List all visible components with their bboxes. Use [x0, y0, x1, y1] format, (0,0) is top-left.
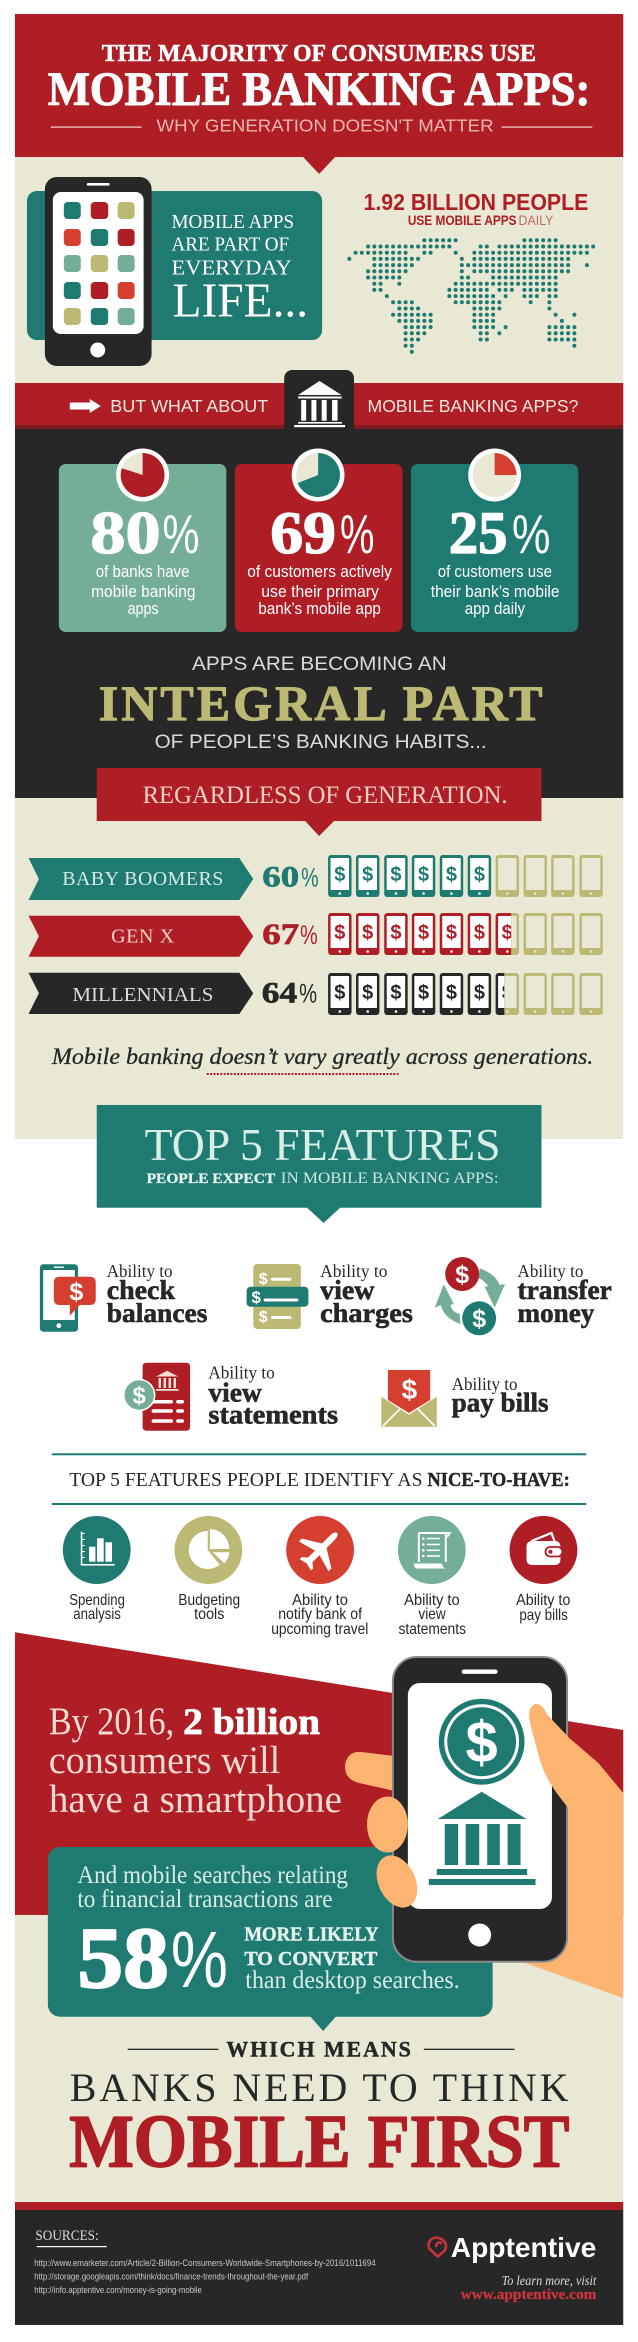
- logo: apptentive: Apptentive: [451, 2232, 596, 2263]
- chevron label: MILLENNIALS: [72, 984, 213, 1006]
- description: app daily: [465, 600, 526, 618]
- label: view: [418, 1606, 446, 1623]
- panel: cream closing section: [15, 1915, 623, 2202]
- band text left: BUT WHAT ABOUT: [110, 396, 268, 416]
- banner: top 5 features: IN MOBILE BANKING APPS:: [281, 1170, 499, 1187]
- card: 80% of banks: [59, 448, 226, 632]
- icon: statement document: $: [133, 1382, 146, 1410]
- icon: wallet: [527, 1533, 562, 1565]
- text: [320, 1261, 413, 1328]
- icon: bar chart: [81, 1532, 115, 1566]
- label: tools: [194, 1606, 225, 1623]
- phone pictogram row: $: [474, 982, 485, 1004]
- icon: bank: [429, 1792, 535, 1885]
- label: [178, 1592, 240, 1623]
- phone pictogram row: $: [334, 864, 345, 886]
- description: of customers use: [438, 563, 552, 581]
- percent: [262, 918, 318, 951]
- text: charges: [320, 1298, 413, 1328]
- callout: 58% more likely to convert: [48, 1847, 493, 2031]
- panel: footer: [15, 2202, 623, 2325]
- callout: 58% more likely to convert: to financial transactions are: [77, 1886, 333, 1913]
- phone pictogram row: [328, 973, 603, 1015]
- text: mobile apps are part of everyday life: EVERYDAY: [172, 256, 292, 280]
- text: check: [107, 1275, 175, 1305]
- number: 80%: 80: [90, 500, 161, 566]
- sources: SOURCES:: [35, 2228, 99, 2244]
- phone pictogram row: $: [446, 864, 457, 886]
- phone pictogram row: $: [474, 864, 485, 886]
- description: of customers actively: [247, 563, 393, 581]
- text: Ability to: [107, 1261, 173, 1281]
- band text right: MOBILE BANKING APPS?: [368, 396, 578, 416]
- text: which means: WHICH MEANS: [226, 2037, 411, 2062]
- row: baby boomers: [29, 855, 603, 900]
- feature: transfer money: [435, 1257, 612, 1335]
- label: analysis: [73, 1606, 121, 1623]
- text: 2 billion consumers: have a smartphone: [49, 1778, 342, 1821]
- hand: thumb and fingers over phone: [367, 1704, 568, 1914]
- heading: apps are becoming an: APPS ARE BECOMING AN: [192, 654, 447, 675]
- text: Ability to: [452, 1374, 518, 1394]
- text: view: [320, 1275, 375, 1305]
- sources: http://storage.googleapis.com/think/docs/finance-trends-throughout-the-year.pdf: [34, 2271, 309, 2281]
- phone pictogram row: $: [502, 922, 513, 944]
- heading: nice to have: [52, 1453, 586, 1505]
- description: of banks have: [96, 563, 189, 581]
- banner: top 5 features: PEOPLE EXPECT: [147, 1171, 275, 1187]
- feature: view charges: [247, 1261, 413, 1329]
- text: balances: [107, 1298, 207, 1328]
- label: [69, 1592, 125, 1623]
- heading: of people's banking habits: OF PEOPLE’S BANKING HABITS...: [155, 732, 487, 753]
- card: 69% of customers: [235, 448, 403, 632]
- phone pictogram row: $: [418, 864, 429, 886]
- number: 80%: [90, 500, 199, 566]
- phone pictogram row: $: [362, 982, 373, 1004]
- card: 25% of customers: [411, 448, 578, 632]
- icon: arrow: [70, 399, 101, 413]
- panel: but what about mobile banking apps band: [15, 383, 623, 429]
- icon: envelope with bill: [381, 1370, 437, 1427]
- phone pictogram row: $: [418, 982, 429, 1004]
- phone pictogram row: $: [390, 982, 401, 1004]
- description: use their primary: [261, 583, 380, 601]
- icon: charges list: $: [259, 1309, 268, 1326]
- title line 1: THE MAJORITY OF CONSUMERS USE: [102, 41, 536, 67]
- stat: 1.92 billion people: DAILY: [519, 213, 553, 228]
- title line 2: MOBILE BANKING APPS:: [48, 63, 590, 116]
- chevron label: [29, 916, 253, 957]
- percent: [262, 977, 317, 1010]
- panel: dark statistics section: [15, 370, 623, 798]
- label: Spending: [69, 1592, 125, 1609]
- feature: pay bills: [381, 1370, 548, 1427]
- banner: regardless of generation: [97, 768, 541, 836]
- text: Ability to: [518, 1261, 583, 1281]
- heading: mobile first: MOBILE FIRST: [69, 2101, 569, 2184]
- percent: 64: [262, 977, 297, 1010]
- callout: 58% more likely to convert: MORE LIKELY: [244, 1924, 379, 1946]
- icon: charges list: $: [252, 1288, 262, 1307]
- text: 2 billion consumers: 2 billion: [183, 1701, 320, 1742]
- label: notify bank of: [278, 1606, 363, 1623]
- label: [516, 1592, 570, 1624]
- chevron label: BABY BOOMERS: [62, 868, 223, 890]
- number: 25%: [449, 500, 550, 566]
- percent: 60: [262, 861, 299, 894]
- callout: 58% more likely to convert: TO CONVERT: [244, 1948, 378, 1970]
- stat: 1.92 billion people: 1.92 BILLION PEOPLE: [363, 189, 588, 215]
- label: [271, 1592, 368, 1638]
- hand: palm behind phone: [345, 1715, 623, 1998]
- phone pictogram row: $: [390, 922, 401, 944]
- description: mobile banking: [91, 583, 195, 601]
- stat: 1.92 billion people: USE MOBILE APPS: [408, 213, 517, 228]
- sources: http://www.emarketer.com/Article/2-Billion-Consumers-Worldwide-Smartphones-by-2016/1011694: [34, 2258, 376, 2268]
- text: [107, 1261, 207, 1328]
- stat: 1.92 billion people: [363, 189, 588, 228]
- label: Ability to: [516, 1592, 570, 1609]
- icon: scroll: [414, 1533, 450, 1568]
- percent: %: [300, 920, 318, 950]
- text: 2 billion consumers: [49, 1700, 342, 1821]
- label: upcoming travel: [271, 1621, 368, 1638]
- panel: mobile apps everyday life: [27, 177, 322, 366]
- label: Ability to: [404, 1592, 460, 1609]
- icon: pie chart: [189, 1529, 229, 1569]
- nice-to-have: view statements: [398, 1516, 466, 1638]
- text: pay bills: [452, 1388, 548, 1418]
- icon: dollar coin: [439, 1699, 525, 1785]
- phone pictogram row: $: [362, 922, 373, 944]
- sources: http://info.apptentive.com/money-is-going-mobile: [34, 2285, 202, 2295]
- description: apps: [128, 600, 159, 618]
- nice-to-have: spending analysis: [63, 1516, 131, 1623]
- chevron label: [29, 858, 253, 900]
- banner: top 5 features: TOP 5 FEATURES: [145, 1120, 501, 1170]
- icon: dollar coin: $: [466, 1711, 498, 1775]
- feature: check balances: [40, 1261, 207, 1332]
- icon: transfer arrows: $: [455, 1261, 469, 1289]
- heading: nice to have: TOP 5 FEATURES PEOPLE IDENTIFY AS: [69, 1469, 423, 1491]
- nice-to-have: pay bills: [510, 1516, 577, 1624]
- phone pictogram row: $: [334, 922, 345, 944]
- text: mobile apps are part of everyday life: [172, 211, 308, 328]
- description: [247, 563, 393, 618]
- icon: bank tab: [284, 370, 354, 429]
- number: 69%: %: [340, 503, 374, 565]
- description: [91, 563, 195, 618]
- percent: [262, 861, 319, 894]
- description: their bank’s mobile: [431, 583, 559, 601]
- phone pictogram row: $: [418, 922, 429, 944]
- subtitle: WHY GENERATION DOESN'T MATTER: [157, 116, 494, 136]
- number: 69%: [270, 500, 374, 566]
- icon: charges list: $: [259, 1271, 268, 1288]
- text: [208, 1363, 338, 1430]
- callout: 58% more likely to convert: And mobile searches relating: [77, 1862, 348, 1889]
- number: 58%: [77, 1910, 228, 2006]
- icon: phone with apps: [45, 177, 152, 366]
- text: statements: [208, 1399, 338, 1430]
- text: transfer: [518, 1275, 612, 1305]
- phone pictogram row: $: [502, 982, 513, 1004]
- phone pictogram row: [328, 855, 603, 897]
- number: 58%: 58: [77, 1910, 169, 2006]
- percent: 67: [262, 918, 299, 951]
- phone pictogram row: $: [446, 922, 457, 944]
- icon: phone with speech bubble: $: [69, 1278, 83, 1306]
- label: [398, 1592, 466, 1638]
- banner: regardless of generation: REGARDLESS OF GENERATION.: [143, 782, 508, 809]
- pie: 80%: [116, 448, 169, 502]
- description: bank’s mobile app: [258, 600, 381, 618]
- icon: airplane: [290, 1518, 352, 1580]
- text: learn more: To learn more, visit: [502, 2274, 597, 2289]
- text: money: [518, 1298, 595, 1328]
- phone pictogram row: $: [334, 982, 345, 1004]
- chevron label: [29, 973, 253, 1014]
- number: 69%: 69: [270, 500, 336, 566]
- text: learn more: [461, 2274, 597, 2303]
- number: 25%: %: [512, 503, 550, 565]
- text: [452, 1374, 548, 1418]
- label: pay bills: [519, 1607, 568, 1624]
- chevron label: GEN X: [111, 926, 175, 948]
- heading: integral part: INTEGRAL PART: [99, 676, 542, 731]
- phone pictogram row: $: [474, 922, 485, 944]
- row: gen x: [29, 913, 603, 957]
- label: Budgeting: [178, 1592, 240, 1609]
- text: 2 billion consumers: By 2016,: [49, 1700, 174, 1743]
- label: statements: [398, 1621, 466, 1638]
- text: 2 billion consumers: consumers will: [49, 1739, 280, 1782]
- icon: statement document: [124, 1363, 190, 1431]
- percent: %: [299, 979, 317, 1009]
- sources: [34, 2228, 376, 2295]
- label: Ability to: [292, 1592, 348, 1609]
- text: Ability to: [320, 1261, 388, 1281]
- panel: cream generation section background: [15, 798, 623, 1139]
- phone pictogram row: $: [390, 864, 401, 886]
- callout: 58% more likely to convert: than desktop searches.: [245, 1967, 460, 1994]
- callout: mobile banking doesn't vary: Mobile banking doesn’t vary greatly across generations.: [51, 1044, 593, 1069]
- panel: header: [15, 14, 623, 174]
- description: [431, 563, 559, 618]
- text: mobile apps are part of everyday life: MOBILE APPS: [172, 211, 294, 233]
- heading: banks need to think: BANKS NEED TO THINK: [70, 2065, 569, 2110]
- nice-to-have: budgeting tools: [175, 1516, 242, 1623]
- icon: phone with speech bubble: [40, 1264, 96, 1332]
- cream background: top: [15, 157, 623, 383]
- nice-to-have: notify bank of travel: [271, 1516, 368, 1638]
- heading: nice to have: NICE-TO-HAVE:: [427, 1469, 570, 1491]
- text: view: [208, 1378, 262, 1408]
- panel: red slanted section: [15, 1632, 623, 1915]
- phone pictogram row: $: [446, 982, 457, 1004]
- row: millennials: [29, 973, 603, 1015]
- icon: large phone with bank: [393, 1657, 567, 1962]
- number: 58%: %: [171, 1915, 228, 2004]
- text: mobile apps are part of everyday life: ARE PART OF: [172, 234, 289, 256]
- pie: 69%: [292, 448, 345, 502]
- icon: transfer arrows: [435, 1257, 505, 1335]
- text: learn more: www.apptentive.com: [461, 2287, 597, 2303]
- number: 80%: %: [163, 503, 199, 565]
- pie: 25%: [468, 448, 521, 502]
- number: 25%: 25: [449, 500, 508, 566]
- percent: %: [301, 863, 319, 893]
- banner: top 5 features: [97, 1105, 541, 1223]
- phone pictogram row: [328, 913, 603, 955]
- text: [518, 1261, 612, 1328]
- icon: dotted world map: [349, 240, 593, 352]
- feature: view statements: [124, 1363, 338, 1431]
- icon: envelope with bill: $: [402, 1374, 418, 1405]
- text: Ability to: [208, 1363, 275, 1383]
- phone pictogram row: $: [362, 864, 373, 886]
- icon: transfer arrows: $: [472, 1305, 486, 1333]
- text: mobile apps are part of everyday life: LIFE...: [173, 273, 308, 328]
- icon: charges list: [247, 1264, 308, 1329]
